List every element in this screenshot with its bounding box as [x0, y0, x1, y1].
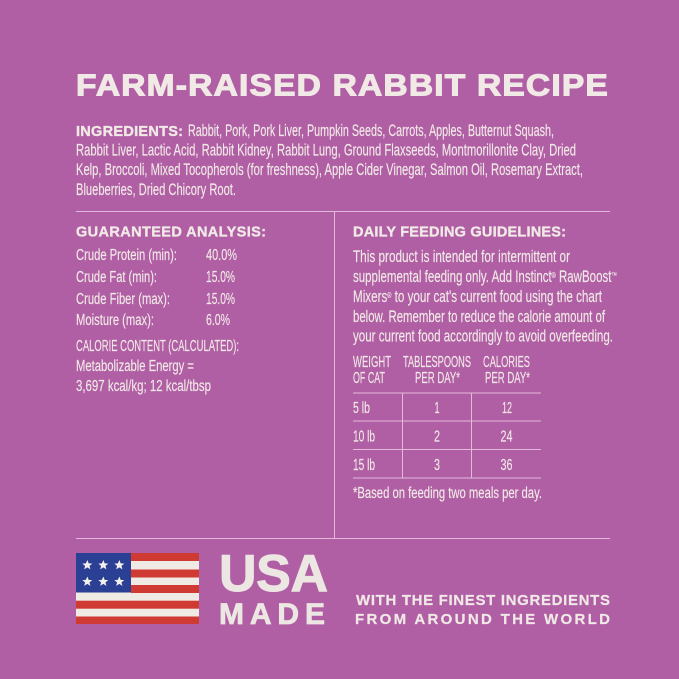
analysis values: Crude Fiber (max): — [76, 291, 170, 308]
panel: daily feeding guidelines — [353, 224, 617, 502]
feeding guidelines paragraph: RawBoost — [556, 268, 612, 286]
feeding table: 24 — [500, 428, 513, 446]
calorie content: CALORIE CONTENT (CALCULATED): — [76, 338, 239, 355]
ingredients text block — [76, 122, 583, 199]
analysis values: 15.0% — [206, 291, 235, 308]
calorie content — [76, 338, 239, 395]
feeding guidelines paragraph — [353, 248, 617, 346]
tagline: WITH THE FINEST INGREDIENTS — [356, 592, 610, 609]
analysis values — [76, 247, 237, 329]
feeding table: PER DAY* — [485, 370, 530, 387]
usa made badge text: MADE — [219, 598, 325, 631]
feeding table: 3 — [434, 457, 440, 474]
footnote: *Based on feeding two meals per day. — [353, 485, 542, 502]
feeding guidelines paragraph: This product is intended for intermittent or — [353, 248, 570, 266]
title: FARM-RAISED RABBIT RECIPE — [76, 68, 609, 102]
feeding table: OF CAT — [353, 370, 385, 387]
feeding table: PER DAY* — [415, 370, 460, 387]
calorie content: 3,697 kcal/kg; 12 kcal/tbsp — [76, 378, 211, 395]
feeding guidelines paragraph: ™ — [611, 271, 617, 280]
feeding table: 15 lb — [353, 457, 375, 474]
analysis values: 6.0% — [206, 312, 230, 329]
calorie content: Metabolizable Energy = — [76, 358, 194, 375]
ingredients text block: Blueberries, Dried Chicory Root. — [76, 181, 236, 199]
feeding table: 2 — [434, 428, 440, 446]
usa made badge text: USA — [219, 545, 328, 603]
feeding guidelines paragraph: Mixers — [353, 288, 402, 306]
usa made badge text — [219, 545, 328, 631]
feeding guidelines paragraph: ® — [387, 291, 392, 300]
analysis values: Crude Protein (min): — [76, 247, 177, 264]
tagline — [355, 592, 610, 628]
icon: american flag — [76, 553, 199, 624]
tagline: FROM AROUND THE WORLD — [355, 611, 610, 628]
heading: daily feeding guidelines: DAILY FEEDING GUIDELINES: — [353, 224, 566, 240]
feeding table: WEIGHT — [353, 354, 391, 371]
analysis values: Crude Fat (min): — [76, 269, 157, 286]
feeding table: 5 lb — [353, 400, 370, 417]
feeding table: CALORIES — [483, 354, 530, 371]
panel: guaranteed analysis — [76, 224, 266, 395]
feeding table: 1 — [434, 400, 440, 417]
feeding table — [353, 354, 541, 478]
analysis values: Moisture (max): — [76, 312, 154, 329]
ingredients text block: INGREDIENTS: — [76, 124, 183, 140]
analysis values: 15.0% — [206, 269, 235, 286]
feeding table: 36 — [500, 457, 512, 474]
feeding guidelines paragraph: ® — [552, 271, 556, 280]
analysis values: 40.0% — [206, 247, 237, 264]
feeding table: 12 — [502, 400, 512, 417]
feeding table: TABLESPOONS — [403, 354, 471, 371]
feeding guidelines paragraph: supplemental feeding only. Add Instinct — [353, 268, 638, 286]
feeding table: 10 lb — [353, 428, 375, 446]
heading: guaranteed analysis: GUARANTEED ANALYSIS: — [76, 224, 266, 240]
